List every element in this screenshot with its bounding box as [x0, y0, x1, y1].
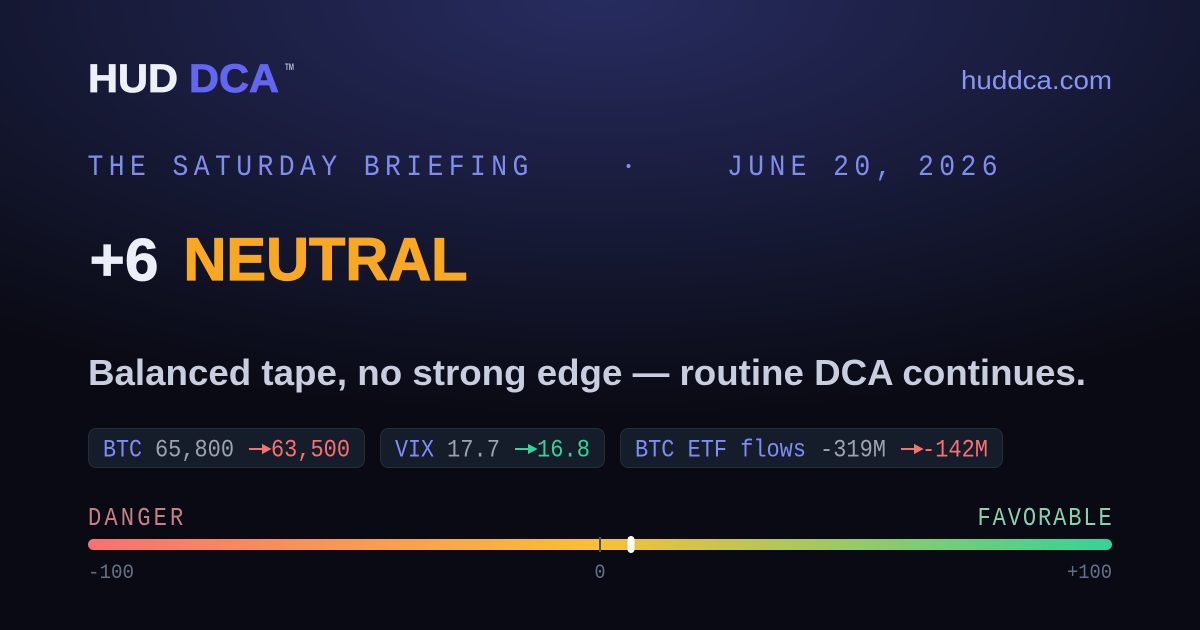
gauge bar	[88, 536, 1112, 553]
arrow: BTC down	[249, 446, 270, 452]
gauge scale	[88, 562, 1112, 585]
score and rating: +6	[90, 226, 158, 294]
chip: VIX: 17.7	[447, 436, 500, 464]
score marker	[628, 536, 634, 553]
chip: BTC price: 63,500	[271, 436, 350, 464]
gauge scale: +100	[1067, 562, 1112, 585]
website link: huddca.com	[961, 65, 1112, 95]
logo	[88, 57, 294, 101]
logo: TM	[285, 62, 294, 72]
logo: HUD	[88, 57, 178, 101]
chip: VIX: 16.8	[537, 436, 590, 464]
zero tick	[599, 537, 601, 552]
chip: BTC ETF flows: -142M	[922, 436, 988, 464]
gauge labels: DANGER	[88, 505, 186, 534]
briefing date line	[88, 151, 1003, 185]
chip: VIX	[380, 428, 604, 468]
gauge labels: FAVORABLE	[978, 505, 1114, 534]
briefing date line: THE SATURDAY BRIEFING	[88, 151, 534, 185]
briefing date line: JUNE 20, 2026	[727, 151, 1003, 185]
chip: BTC ETF flows: BTC ETF flows	[635, 436, 806, 464]
gauge labels	[88, 505, 1114, 534]
chip: BTC price	[88, 428, 364, 468]
chip: VIX: VIX	[395, 436, 434, 464]
gauge scale: -100	[88, 562, 134, 585]
score and rating: NEUTRAL	[184, 226, 468, 293]
chip: BTC ETF flows: -319M	[820, 436, 886, 464]
headline summary: Balanced tape, no strong edge — routine DCA continues.	[88, 352, 1086, 393]
arrow: VIX down	[515, 446, 536, 452]
chip: BTC price: 65,800	[155, 436, 234, 464]
logo: DCA	[189, 57, 279, 101]
arrow: ETF flows	[901, 446, 922, 452]
chip: BTC price: BTC	[103, 436, 142, 464]
chip: BTC ETF flows	[620, 428, 1002, 468]
gauge scale: 0	[594, 562, 606, 585]
